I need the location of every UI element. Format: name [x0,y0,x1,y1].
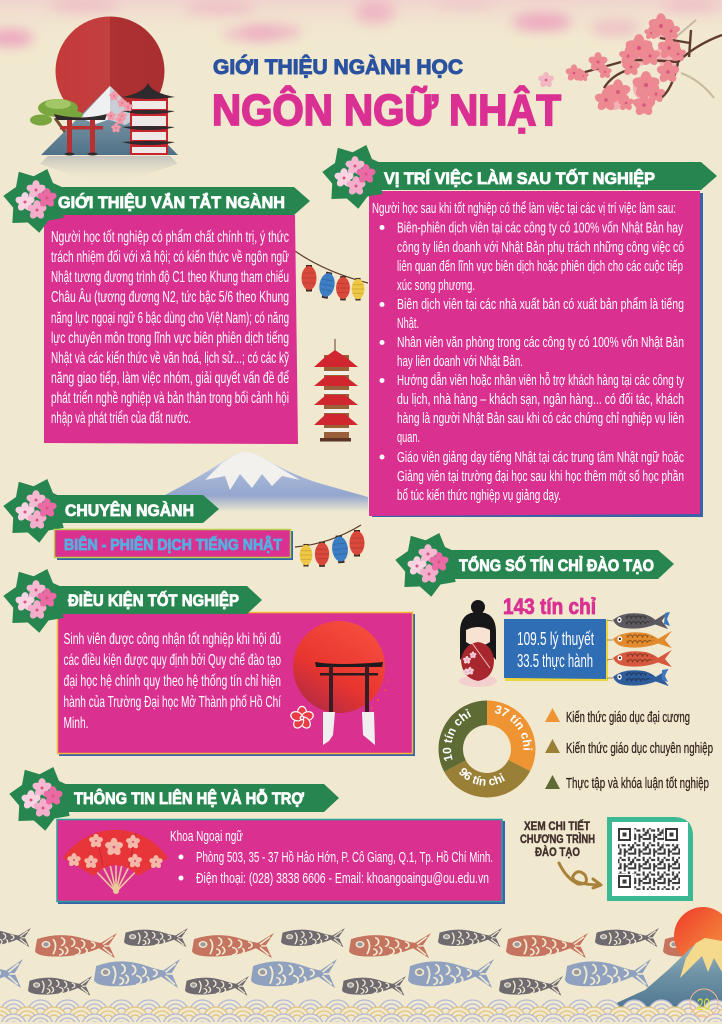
donut labels: 96 tín chỉ [459,768,505,786]
segment: 10 tín chỉ [439,700,487,772]
call to action text: CHƯƠNG TRÌNH [520,833,595,846]
heading: vị trí việc làm sau tốt nghiệp: VỊ TRÍ VIỆC LÀM SAU TỐT NGHIỆP [384,168,655,188]
segment: 96 tín chỉ [444,760,530,797]
bullet list: hay liên doanh với Nhật Bản. [397,353,523,370]
title line 1: GIỚI THIỆU NGÀNH HỌC [213,55,463,79]
icon: sun with torii gate [290,621,389,745]
page number [690,989,718,1017]
graduation text: hành của Trường Đại học Mở Thành phố Hồ Chí [64,694,281,711]
page number: 20 [697,995,710,1014]
arrow to QR code [559,863,601,888]
donut chart [438,700,536,798]
decorative mountain Fuji middle [155,452,368,512]
fish pattern row 2 [0,959,651,996]
call to action text [520,820,595,859]
legend [545,708,713,792]
heading: vị trí việc làm sau tốt nghiệp [322,145,717,209]
contact text [170,828,493,887]
graduation text: Minh. [64,715,88,732]
credit breakdown box [504,619,608,681]
kokeshi doll [459,600,497,687]
panel: thông tin liên hệ [57,820,505,904]
corner sun and Mount Fuji [601,907,722,1010]
legend item: đại cương [545,708,690,726]
panel: vị trí việc làm [369,191,703,517]
bullet list: Nhật. [397,315,419,332]
heading: tổng số tín chỉ [395,533,674,597]
heading: giới thiệu vắn tắt ngành: GIỚI THIỆU VẮN TẮT NGÀNH [58,193,285,212]
intro text: năng giao tiếp, làm việc nhóm, giải quyết vấn đề để [51,369,289,387]
credit total: 143 tín chỉ [503,594,596,619]
graduation text: đại học hệ chính quy theo hệ thống tín chỉ hiện [64,673,281,690]
illustration: sun, Mount Fuji, torii and pagoda [30,16,178,184]
bullet list: xúc song phương. [397,277,475,294]
intro text: trách nhiệm đối với xã hội; có kiến thức về ngôn ngữ [51,249,289,266]
heading: điều kiện tốt nghiệp [3,569,262,633]
contact text: Khoa Ngoại ngữ [170,828,243,845]
heading: thông tin liên hệ và hỗ trợ [9,767,339,831]
panel background [57,820,502,902]
intro text: phát triển nghề nghiệp và bản thân trong bối cảnh hội [51,389,289,407]
credit breakdown box: 33.5 thực hành [517,651,593,671]
heading: chuyên ngành [3,479,219,543]
major name box: BIÊN - PHIÊN DỊCH TIẾNG NHẬT [64,535,282,554]
panel: giới thiệu [44,215,298,444]
lantern string top [295,251,368,300]
major name box [54,530,293,560]
intro text: năng lực ngoại ngữ 6 bậc dùng cho Việt Nam); có năng [51,310,289,327]
intro text: Nhật tương đương trình độ C1 theo Khung tham chiếu [51,269,289,286]
intro text [51,228,289,427]
segment: 37 tín chỉ [487,700,535,771]
credit breakdown box: 109.5 lý thuyết [517,629,594,649]
lantern string lower [295,525,364,567]
icon: folding fan [63,830,168,894]
bullet list: quan. [397,429,420,446]
heading: chuyên ngành: CHUYÊN NGÀNH [65,501,194,520]
heading: điều kiện tốt nghiệp: ĐIỀU KIỆN TỐT NGHIỆP [68,590,239,610]
title [212,55,561,135]
title line 2: NGÔN NGỮ NHẬT [212,84,561,135]
panel background [369,191,700,516]
call to action text: ĐÀO TẠO [535,846,580,859]
panel shadow [59,614,415,756]
graduation text: Sinh viên được công nhận tốt nghiệp khi hội đủ [64,631,281,648]
panel background [44,215,298,444]
wave pattern [0,999,722,1022]
pink clouds at top [0,0,722,47]
koi fish streamers [607,612,672,686]
donut labels: 37 tín chỉ [494,706,532,750]
heading: thông tin liên hệ và hỗ trợ: THÔNG TIN LIÊN HỆ VÀ HỖ TRỢ [74,789,305,808]
heading: tổng số tín chỉ: TỔNG SỐ TÍN CHỈ ĐÀO TẠO [459,555,654,575]
contact text: Điện thoại: (028) 3838 6606 - Email: khoangoaingu@ou.edu.vn [196,870,489,887]
bullet list: bổ túc kiến thức nghiệp vụ giảng dạy. [397,487,561,504]
graduation text: các điều kiện được quy định bởi Quy chế đào tạo [64,652,281,669]
intro text: nhập và phát triển của đất nước. [51,409,191,427]
panel background [58,612,412,754]
panel shadow [58,821,505,904]
donut labels [442,706,532,786]
call to action text: XEM CHI TIẾT [524,820,590,833]
QR code [607,817,693,901]
bullet list [380,220,684,504]
graduation text [64,631,281,732]
cherry blossom branch [537,13,722,117]
heading: giới thiệu vắn tắt ngành [3,169,310,233]
donut labels: 10 tín chỉ [442,708,472,761]
intro text: Châu Âu (tương đương N2, tức bậc 5/6 theo Khung [51,287,289,306]
panel: điều kiện tốt nghiệp [58,612,415,756]
fish pattern row 1 [0,928,722,958]
intro text: Người học tốt nghiệp có phẩm chất chính trị, ý thức [51,228,289,246]
red pagoda [314,339,358,442]
intro text: lực chuyên môn trong lĩnh vực biên phiên dịch tiếng [51,330,289,347]
intro text: Nhật và các kiến thức về văn hoá, lịch sử...; có các kỹ [51,350,289,367]
panel shadow [372,193,703,517]
contact text: Phòng 503, 35 - 37 Hồ Hảo Hớn, P. Cô Giang, Q.1, Tp. Hồ Chí Minh. [196,849,493,866]
